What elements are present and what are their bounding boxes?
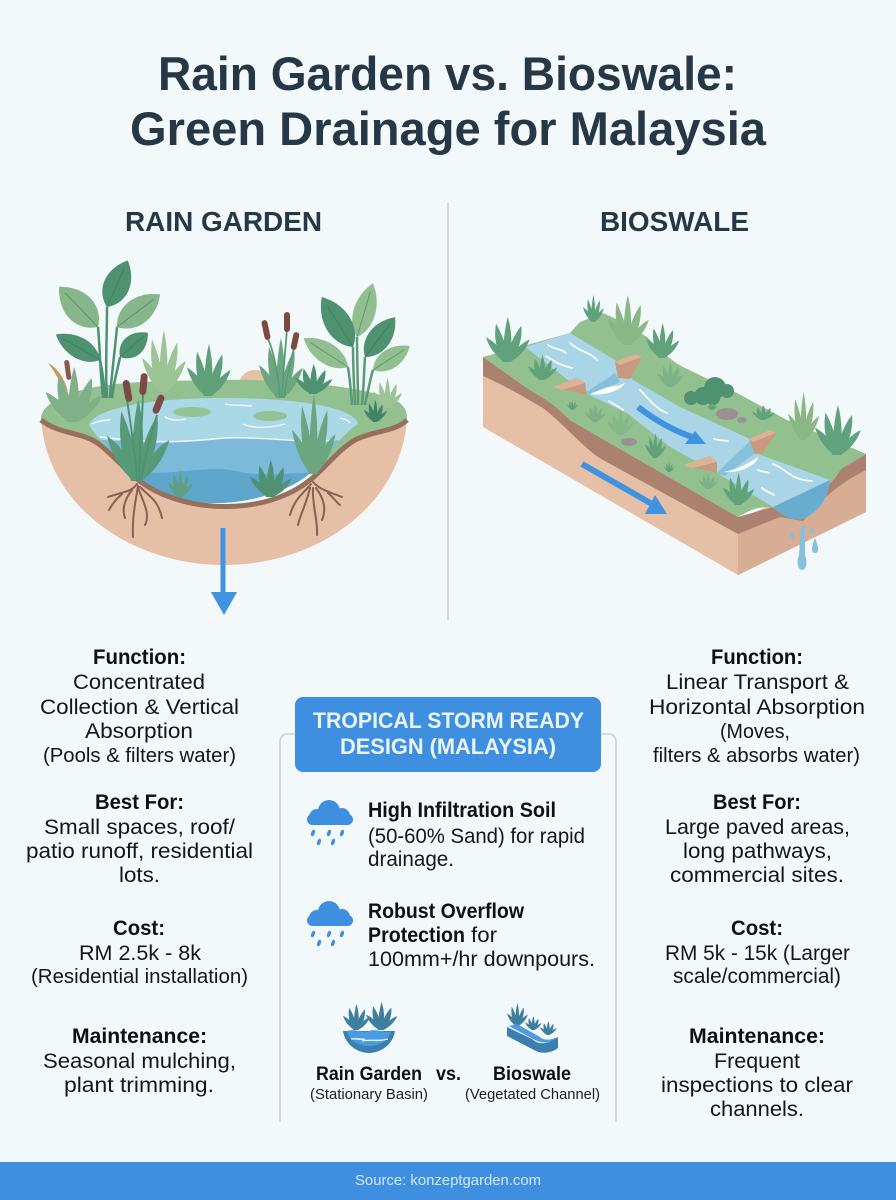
maintenance: channels. <box>710 1098 804 1121</box>
soil bowl <box>41 418 407 565</box>
cost: scale/commercial) <box>673 965 841 988</box>
light arching leaves <box>142 330 186 392</box>
title: Green Drainage for Malaysia <box>130 102 767 155</box>
back cattails <box>259 312 303 398</box>
panel header badge: TROPICAL STORM READY <box>313 708 584 733</box>
cost: Cost: <box>113 917 165 940</box>
text: high infiltration soil: (50-60% Sand) for rapid <box>368 825 585 848</box>
text: robust overflow protection: Robust Overflow <box>368 900 525 923</box>
icon: bioswale channel <box>507 1003 558 1053</box>
text: robust overflow protection: 100mm+/hr downpours. <box>368 948 595 971</box>
label: rain garden comparison <box>310 1064 428 1103</box>
foam and ripples <box>546 343 812 495</box>
label: bioswale comparison <box>465 1064 600 1103</box>
left column: rain garden facts <box>26 646 253 1097</box>
function: (Moves, <box>720 721 790 743</box>
function: Concentrated <box>73 671 205 694</box>
maintenance <box>661 1025 853 1121</box>
function: Function: <box>93 646 186 669</box>
rocks <box>621 408 747 446</box>
check dams <box>553 354 776 473</box>
foreground right reeds <box>292 394 336 474</box>
heading: bioswale: BIOSWALE <box>600 206 749 237</box>
soil layer line <box>41 420 407 507</box>
underwater tuft left <box>168 470 193 497</box>
water drips <box>790 526 818 570</box>
illustration: rain garden cross-section <box>41 255 415 615</box>
cost <box>665 917 850 988</box>
grass rim <box>41 380 407 465</box>
cost <box>31 917 248 988</box>
label: bioswale comparison: Bioswale <box>493 1064 571 1085</box>
best for: long pathways, <box>683 840 832 863</box>
function: Collection & Vertical <box>40 696 239 719</box>
dark tuft right of cattails <box>295 364 332 394</box>
best for: patio runoff, residential <box>26 840 253 863</box>
function: (Pools & filters water) <box>43 745 236 767</box>
best for <box>665 791 850 887</box>
arrow: flow through soil <box>582 464 667 514</box>
panel: tropical storm ready design <box>280 697 616 1122</box>
illustration: bioswale block diagram <box>483 295 866 575</box>
small dark tuft <box>364 400 387 422</box>
dark soil layer <box>483 357 738 534</box>
water channel <box>525 333 830 519</box>
maintenance <box>43 1025 236 1097</box>
panel header badge: DESIGN (MALAYSIA) <box>340 734 556 759</box>
maintenance: Maintenance: <box>72 1025 207 1048</box>
arrow: downward infiltration <box>211 528 237 615</box>
cost: (Residential installation) <box>31 966 248 988</box>
best for: Large paved areas, <box>665 816 850 839</box>
best for: Best For: <box>95 791 184 814</box>
water steps <box>585 373 620 395</box>
best for: Best For: <box>713 791 801 814</box>
cost: RM 2.5k - 8k <box>79 942 202 965</box>
label: rain garden comparison: Rain Garden <box>316 1064 422 1085</box>
maintenance: Seasonal mulching, <box>43 1050 236 1073</box>
label: bioswale comparison: (Vegetated Channel) <box>465 1086 600 1103</box>
text: robust overflow protection <box>368 900 595 971</box>
text: high infiltration soil: drainage. <box>368 848 454 871</box>
footer source bar <box>0 1162 896 1200</box>
label: rain garden comparison: (Stationary Basin) <box>310 1086 428 1103</box>
text: robust overflow protection: for <box>471 924 497 947</box>
panel header badge <box>295 697 601 772</box>
best for: Small spaces, roof/ <box>44 816 235 839</box>
icon: rain garden basin <box>343 1002 397 1053</box>
back right plant with large leaves <box>298 280 415 405</box>
heading: rain garden: RAIN GARDEN <box>125 206 322 237</box>
right column: bioswale facts <box>649 646 865 1121</box>
function: Function: <box>711 646 803 669</box>
label: vs: vs. <box>436 1064 461 1085</box>
centre grass tuft <box>187 344 231 396</box>
function: Horizontal Absorption <box>649 696 865 719</box>
shrub <box>684 377 734 405</box>
text: high infiltration soil: High Infiltration Soil <box>368 799 556 822</box>
function: Absorption <box>85 720 193 743</box>
grass tufts <box>486 295 861 505</box>
cost: RM 5k - 15k (Larger <box>665 942 850 965</box>
cost: Cost: <box>731 917 783 940</box>
icon: rain cloud <box>307 800 353 846</box>
arrow: flow over channel <box>638 407 706 444</box>
soil block <box>483 370 866 575</box>
foreground cattails <box>107 373 169 481</box>
function <box>649 646 865 767</box>
icon: rain cloud <box>307 901 353 947</box>
best for <box>26 791 253 887</box>
maintenance: Frequent <box>714 1050 800 1073</box>
footer source bar: Source: konzeptgarden.com <box>355 1173 541 1189</box>
maintenance: Maintenance: <box>689 1025 825 1048</box>
best for: lots. <box>119 864 160 887</box>
far left bush <box>46 360 103 422</box>
maintenance: plant trimming. <box>64 1074 214 1097</box>
function: filters & absorbs water) <box>653 745 860 767</box>
title: Rain Garden vs. Bioswale: <box>158 47 737 100</box>
text: robust overflow protection: Protection <box>368 924 465 947</box>
grass surface <box>483 313 866 517</box>
text: high infiltration soil <box>368 799 585 871</box>
roots <box>108 482 342 537</box>
pond water <box>89 398 358 503</box>
underwater tuft right <box>250 460 292 497</box>
function <box>40 646 239 767</box>
back left plant with large leaves <box>49 255 168 398</box>
maintenance: inspections to clear <box>661 1074 853 1097</box>
small light tuft <box>373 378 402 408</box>
function: Linear Transport & <box>666 671 849 694</box>
best for: commercial sites. <box>670 864 844 887</box>
title <box>130 47 767 155</box>
